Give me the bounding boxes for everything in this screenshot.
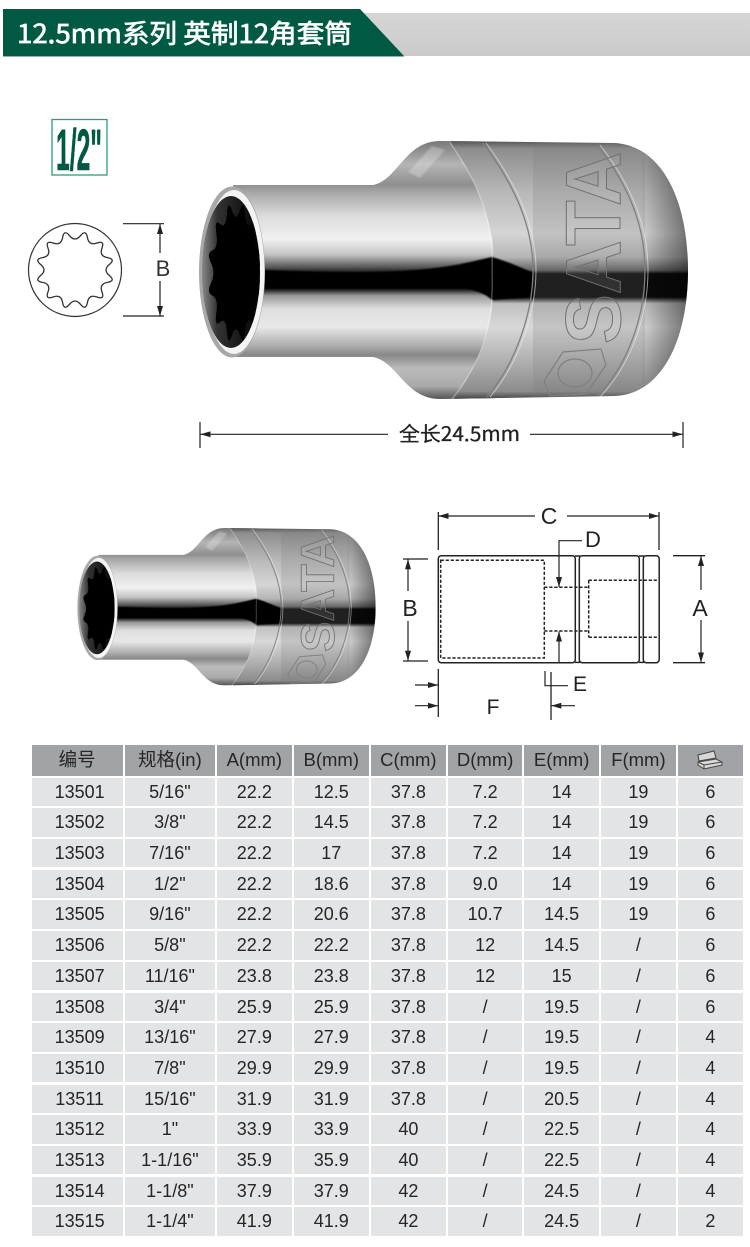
socket mouth, small <box>77 556 118 660</box>
row 13511: / <box>636 1089 641 1109</box>
row 13504: 19 <box>628 874 648 894</box>
row 13502: 3/8" <box>154 812 186 832</box>
row 13513: 4 <box>705 1150 715 1170</box>
table header row: B(mm) <box>304 749 359 770</box>
row 13503: 13503 <box>55 843 105 863</box>
row 13502: 14 <box>552 812 572 832</box>
row 13515: 13515 <box>55 1211 105 1231</box>
row 13507: 23.8 <box>314 966 349 986</box>
row 13513: 35.9 <box>237 1150 272 1170</box>
row 13512: 13512 <box>55 1119 105 1139</box>
row 13505: 22.2 <box>237 904 272 924</box>
header banner <box>3 9 750 57</box>
row 13508: 25.9 <box>237 996 272 1016</box>
row 13511: 37.8 <box>391 1089 426 1109</box>
row 13506: 22.2 <box>237 935 272 955</box>
row 13504: 22.2 <box>237 874 272 894</box>
row 13510: 29.9 <box>314 1058 349 1078</box>
row 13511: 15/16" <box>144 1089 196 1109</box>
row 13513: 35.9 <box>314 1150 349 1170</box>
table header row <box>32 745 743 776</box>
row 13513: 22.5 <box>544 1150 579 1170</box>
row 13503: 7.2 <box>473 843 498 863</box>
row 13504: 18.6 <box>314 874 349 894</box>
row 13501: 13501 <box>55 782 105 802</box>
row 13503 <box>32 839 743 867</box>
dimension D <box>559 527 601 662</box>
dimension B: B <box>402 595 418 621</box>
SATA embossed logo: SATA <box>549 152 637 344</box>
dimension A: A <box>692 595 708 621</box>
row 13514 <box>32 1177 743 1205</box>
row 13509: 27.9 <box>314 1027 349 1047</box>
row 13506: 37.8 <box>391 935 426 955</box>
row 13504: 14 <box>552 874 572 894</box>
specification table <box>32 745 743 1236</box>
table header row: A(mm) <box>227 749 282 770</box>
row 13512: 40 <box>398 1119 418 1139</box>
row 13504: 9.0 <box>473 874 498 894</box>
table header row: C(mm) <box>380 749 437 770</box>
row 13504: 13504 <box>55 874 105 894</box>
row 13509: 19.5 <box>544 1027 579 1047</box>
drive size badge 1/2" <box>52 118 107 183</box>
row 13503: 14 <box>552 843 572 863</box>
row 13505: 14.5 <box>544 904 579 924</box>
socket body outline <box>438 556 659 663</box>
row 13512: 4 <box>705 1119 715 1139</box>
hexagon logo, small <box>288 655 326 684</box>
row 13508: 37.8 <box>391 996 426 1016</box>
row 13510: / <box>483 1058 488 1078</box>
row 13502: 37.8 <box>391 812 426 832</box>
row 13507: 11/16" <box>145 966 195 986</box>
row 13510: 7/8" <box>154 1058 186 1078</box>
row 13515: / <box>483 1211 488 1231</box>
row 13503: 7/16" <box>149 843 191 863</box>
row 13502: 19 <box>628 812 648 832</box>
row 13514: 13514 <box>55 1181 105 1201</box>
row 13513 <box>32 1146 743 1174</box>
row 13506: 22.2 <box>314 935 349 955</box>
row 13514: 37.9 <box>314 1181 349 1201</box>
row 13515 <box>32 1207 743 1236</box>
row 13513: / <box>483 1150 488 1170</box>
row 13510: / <box>636 1058 641 1078</box>
table header row: F(mm) <box>611 749 666 770</box>
row 13503: 22.2 <box>237 843 272 863</box>
row 13502 <box>32 808 743 837</box>
row 13513: / <box>636 1150 641 1170</box>
row 13512: 33.9 <box>314 1119 349 1139</box>
row 13510: 4 <box>705 1058 715 1078</box>
row 13513: 40 <box>398 1150 418 1170</box>
row 13505: 19 <box>628 904 648 924</box>
row 13509: 27.9 <box>237 1027 272 1047</box>
row 13515: 1-1/4" <box>146 1211 194 1231</box>
row 13507: 37.8 <box>391 966 426 986</box>
row 13508: / <box>636 996 641 1016</box>
row 13503: 6 <box>705 843 715 863</box>
row 13506: 12 <box>475 935 495 955</box>
row 13508: / <box>483 996 488 1016</box>
row 13506: 13506 <box>55 935 105 955</box>
row 13502: 22.2 <box>237 812 272 832</box>
text: 1/2" <box>56 118 102 183</box>
row 13505: 13505 <box>55 904 105 924</box>
row 13505: 9/16" <box>149 904 191 924</box>
row 13505 <box>32 900 743 929</box>
overall length dimension: 全长24.5mm <box>399 418 520 447</box>
row 13507: 13507 <box>55 966 105 986</box>
row 13509: / <box>636 1027 641 1047</box>
row 13515: 24.5 <box>544 1211 579 1231</box>
row 13504: 1/2" <box>154 874 186 894</box>
row 13506: 5/8" <box>154 935 186 955</box>
row 13503: 19 <box>628 843 648 863</box>
row 13508 <box>32 993 743 1021</box>
row 13509 <box>32 1023 743 1052</box>
row 13512: / <box>483 1119 488 1139</box>
row 13511: 31.9 <box>314 1089 349 1109</box>
row 13506: 14.5 <box>544 935 579 955</box>
row 13510: 37.8 <box>391 1058 426 1078</box>
dimension C: C <box>541 503 557 529</box>
dimension A <box>673 556 708 663</box>
row 13507 <box>32 962 743 990</box>
row 13501: 19 <box>628 782 648 802</box>
dimension F: F <box>487 696 499 719</box>
row 13513: 1-1/16" <box>141 1150 199 1170</box>
row 13507: 23.8 <box>237 966 272 986</box>
row 13505: 20.6 <box>314 904 349 924</box>
row 13514: 42 <box>398 1181 418 1201</box>
row 13511: 4 <box>705 1089 715 1109</box>
12-point socket profile diagram <box>28 224 170 316</box>
row 13507: 12 <box>475 966 495 986</box>
row 13505: 10.7 <box>468 904 503 924</box>
row 13511: 20.5 <box>544 1089 579 1109</box>
12-point socket profile diagram: B <box>156 256 170 281</box>
row 13513: 13513 <box>55 1150 105 1170</box>
row 13508: 3/4" <box>154 996 186 1016</box>
socket mouth <box>199 186 265 358</box>
row 13506: / <box>636 935 641 955</box>
row 13510: 19.5 <box>544 1058 579 1078</box>
row 13510: 29.9 <box>237 1058 272 1078</box>
table header row: 编号 <box>59 749 96 770</box>
row 13512 <box>32 1115 743 1144</box>
row 13514: 24.5 <box>544 1181 579 1201</box>
row 13501 <box>32 778 743 806</box>
row 13509: / <box>483 1027 488 1047</box>
row 13504: 37.8 <box>391 874 426 894</box>
row 13505: 6 <box>705 904 715 924</box>
row 13515: 41.9 <box>237 1211 272 1231</box>
large socket photo <box>195 135 700 405</box>
row 13512: 1" <box>162 1119 178 1139</box>
row 13501: 6 <box>705 782 715 802</box>
row 13514: / <box>483 1181 488 1201</box>
row 13502: 14.5 <box>314 812 349 832</box>
row 13515: 42 <box>398 1211 418 1231</box>
row 13501: 14 <box>552 782 572 802</box>
row 13503: 37.8 <box>391 843 426 863</box>
row 13512: / <box>636 1119 641 1139</box>
row 13511: 13511 <box>55 1089 104 1109</box>
row 13503: 17 <box>321 843 341 863</box>
row 13501: 37.8 <box>391 782 426 802</box>
row 13509: 13509 <box>55 1027 105 1047</box>
row 13507: / <box>636 966 641 986</box>
row 13509: 37.8 <box>391 1027 426 1047</box>
row 13515: / <box>636 1211 641 1231</box>
SATA embossed logo, small: SATA <box>292 535 345 652</box>
dimension D: D <box>585 527 601 552</box>
row 13501: 7.2 <box>473 782 498 802</box>
row 13514: / <box>636 1181 641 1201</box>
small socket photo <box>75 524 383 689</box>
row 13511: / <box>483 1089 488 1109</box>
row 13501: 12.5 <box>314 782 349 802</box>
row 13514: 37.9 <box>237 1181 272 1201</box>
row 13508: 6 <box>705 996 715 1016</box>
dimension E <box>545 671 587 720</box>
table header row: E(mm) <box>534 749 589 770</box>
dimension E: E <box>573 673 587 696</box>
row 13509: 13/16" <box>144 1027 196 1047</box>
hidden internal lines <box>441 560 659 658</box>
row 13506 <box>32 931 743 960</box>
row 13504: 6 <box>705 874 715 894</box>
title: 12.5mm系列 英制12角套筒 <box>17 14 352 51</box>
row 13501: 22.2 <box>237 782 272 802</box>
row 13509: 4 <box>705 1027 715 1047</box>
row 13515: 2 <box>705 1211 715 1231</box>
table header row: D(mm) <box>457 749 513 770</box>
row 13511: 31.9 <box>237 1089 272 1109</box>
row 13502: 13502 <box>55 812 105 832</box>
row 13510 <box>32 1054 743 1082</box>
row 13508: 25.9 <box>314 996 349 1016</box>
technical dimension drawing <box>402 503 708 720</box>
row 13507: 6 <box>705 966 715 986</box>
row 13510: 13510 <box>55 1058 105 1078</box>
row 13514: 1-1/8" <box>146 1181 194 1201</box>
row 13515: 41.9 <box>314 1211 349 1231</box>
table header row: 规格(in) <box>138 749 202 770</box>
dimension F <box>415 669 499 719</box>
hexagon logo <box>544 349 606 396</box>
row 13507: 15 <box>552 966 572 986</box>
row 13502: 7.2 <box>473 812 498 832</box>
row 13506: 6 <box>705 935 715 955</box>
row 13501: 5/16" <box>149 782 191 802</box>
row 13508: 19.5 <box>544 996 579 1016</box>
row 13511 <box>32 1085 743 1113</box>
row 13502: 6 <box>705 812 715 832</box>
row 13512: 33.9 <box>237 1119 272 1139</box>
icon: tool case quantity <box>698 750 722 770</box>
row 13514: 4 <box>705 1181 715 1201</box>
row 13512: 22.5 <box>544 1119 579 1139</box>
row 13508: 13508 <box>55 996 105 1016</box>
row 13505: 37.8 <box>391 904 426 924</box>
dimension B <box>402 559 428 661</box>
row 13504 <box>32 870 743 898</box>
